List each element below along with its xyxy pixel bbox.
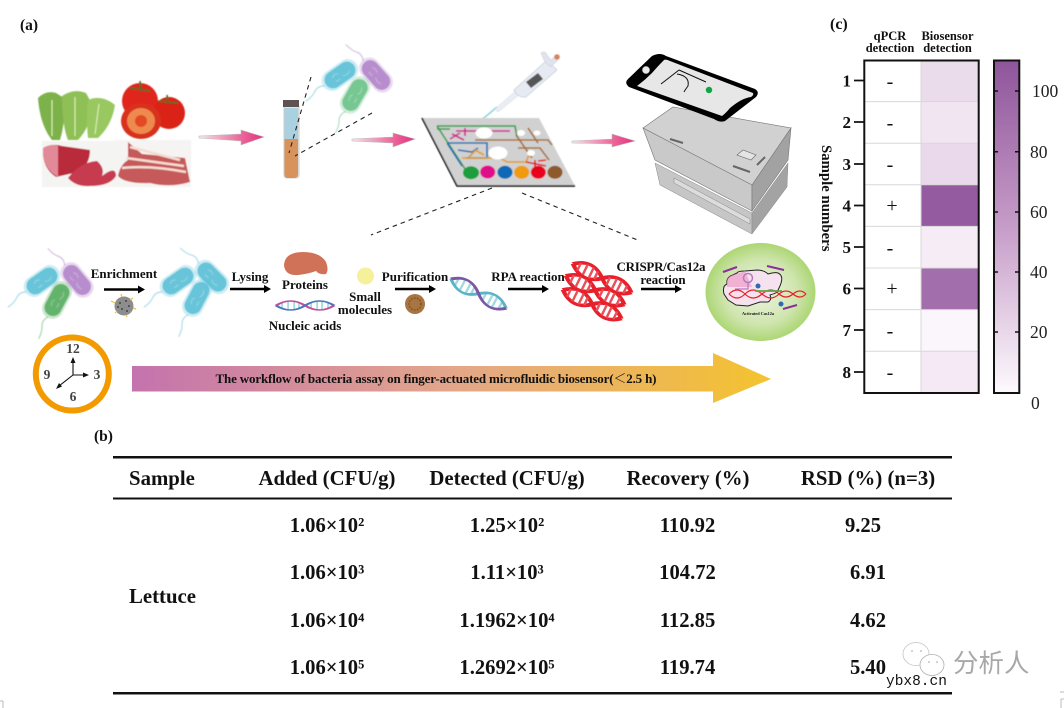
- row 1: 1.06×10²: [290, 515, 364, 537]
- qPCR marks: -: [887, 154, 893, 176]
- step: enrichment: [91, 266, 158, 317]
- table header: Detected (CFU/g): [429, 467, 585, 490]
- watermark: ybx8.cn: [886, 674, 947, 690]
- heatmap cells: [864, 60, 979, 393]
- step: lysing: [230, 269, 271, 293]
- arrow: chip to device: [572, 134, 635, 147]
- colour bar: 100: [1032, 81, 1058, 101]
- table header: Recovery (%): [627, 467, 750, 490]
- step: CRISPR reaction: reaction: [640, 272, 686, 287]
- step: CRISPR reaction: CRISPR/Cas12a: [616, 259, 706, 274]
- row 1: [290, 515, 881, 537]
- row 4: 1.2692×10⁵: [459, 657, 555, 679]
- sample ticks: 7: [842, 321, 852, 340]
- corner mark: [0, 692, 1064, 708]
- table header: Added (CFU/g): [259, 467, 396, 490]
- lysate components: molecules: [338, 302, 392, 317]
- sample ticks: 8: [842, 363, 851, 382]
- icon: pipette: [478, 52, 560, 123]
- column headings: Biosensor: [921, 29, 974, 43]
- icon: activated Cas12a: [706, 243, 816, 341]
- arrow: workflow timeline: The workflow of bacteria assay on finger-actuated microfluidic biosensor(＜2.5 h): [216, 371, 656, 386]
- lysate components: Nucleic acids: [269, 318, 341, 333]
- icon: clock: 3: [94, 367, 101, 382]
- icon: microfluidic chip: [422, 118, 575, 186]
- step: CRISPR reaction: [616, 259, 706, 293]
- heatmap: [818, 29, 979, 393]
- icon: clock: 9: [44, 367, 51, 382]
- table header: [129, 467, 935, 490]
- tomatoes: [121, 81, 185, 139]
- sample ticks: 6: [842, 280, 851, 298]
- icon: clock: [36, 338, 109, 410]
- sample ticks: [842, 72, 864, 382]
- icon: amplified DNA: [560, 258, 634, 325]
- row 1: 9.25: [845, 515, 881, 537]
- row 3: 112.85: [660, 610, 715, 632]
- label: panel c: (c): [830, 16, 848, 33]
- icon: bacteria mix: [1, 240, 98, 343]
- icon: test tube: [283, 100, 299, 178]
- row 3: 4.62: [850, 610, 886, 632]
- lysate components: Small: [349, 289, 381, 304]
- arrow: workflow timeline: [132, 353, 771, 403]
- row 2: [290, 562, 886, 584]
- sample ticks: 4: [842, 196, 852, 216]
- arrow: food to tube: [199, 130, 264, 145]
- qPCR marks: -: [887, 362, 893, 384]
- watermark: 分析人: [953, 643, 1030, 680]
- row 2: 104.72: [659, 562, 716, 584]
- sample ticks: 1: [842, 72, 851, 90]
- icon: clock: 6: [70, 389, 77, 404]
- label: panel b: (b): [94, 428, 113, 445]
- label: panel a: (a): [20, 17, 38, 34]
- table header: RSD (%) (n=3): [801, 467, 935, 490]
- icon: activated Cas12a: Activated Cas12a: [742, 311, 775, 316]
- row 3: 1.06×10⁴: [290, 610, 364, 632]
- row 4: 1.06×10⁵: [290, 657, 364, 679]
- row 4: 5.40: [850, 657, 886, 679]
- sample ticks: 5: [842, 238, 851, 257]
- step: RPA reaction: RPA reaction: [491, 269, 566, 284]
- colour bar: [994, 60, 1058, 413]
- colour bar: 20: [1030, 322, 1048, 342]
- zoom lines: [289, 77, 640, 241]
- row 1: 1.25×10²: [470, 515, 544, 537]
- row 3: 1.1962×10⁴: [459, 610, 555, 632]
- row 2: 1.11×10³: [470, 562, 544, 584]
- lettuce: [38, 91, 115, 140]
- table: recovery results: [113, 456, 952, 694]
- meat: [42, 140, 191, 187]
- icon: purified DNA: [448, 273, 509, 314]
- step: lysing: Lysing: [232, 269, 269, 284]
- watermark: [886, 642, 1030, 690]
- icon: smartphone: [626, 54, 758, 122]
- qPCR marks: [886, 71, 898, 384]
- table row label: Lettuce: [129, 585, 196, 608]
- row 2: 1.06×10³: [290, 562, 364, 584]
- qPCR marks: -: [887, 71, 893, 93]
- icon: clock: 12: [66, 341, 80, 356]
- icon: food samples: [38, 81, 191, 187]
- row 4: [290, 657, 886, 679]
- qPCR marks: -: [887, 238, 893, 260]
- row 2: 6.91: [850, 562, 886, 584]
- qPCR marks: +: [886, 195, 898, 217]
- sample ticks: 2: [842, 113, 851, 132]
- qPCR marks: -: [887, 320, 893, 342]
- step: enrichment: Enrichment: [91, 266, 158, 281]
- step: purification: Purification: [382, 269, 449, 284]
- icon: bacteria top: [299, 36, 397, 137]
- colour bar: 0: [1031, 393, 1040, 413]
- colour bar: 60: [1030, 202, 1048, 222]
- column headings: qPCR: [874, 29, 907, 43]
- y axis title: Sample numbers: [818, 145, 834, 252]
- column headings: [866, 29, 974, 55]
- qPCR marks: -: [887, 112, 893, 134]
- column headings: detection: [923, 41, 972, 55]
- row 1: 110.92: [660, 515, 715, 537]
- row 3: [290, 610, 886, 632]
- colour bar: 40: [1030, 262, 1048, 282]
- step: purification: [382, 269, 449, 314]
- lysate components: Proteins: [282, 277, 328, 292]
- icon: enriched bacteria: [137, 239, 234, 341]
- column headings: detection: [866, 41, 914, 55]
- arrow: tube to chip: [352, 133, 415, 147]
- qPCR marks: +: [886, 278, 898, 300]
- sample ticks: 3: [842, 155, 851, 174]
- row 4: 119.74: [660, 657, 715, 679]
- colour bar: 80: [1030, 142, 1048, 162]
- table header: Sample: [129, 467, 195, 490]
- step: RPA reaction: [491, 269, 566, 293]
- icon: detection box: [643, 107, 791, 234]
- lysate components: [269, 252, 392, 333]
